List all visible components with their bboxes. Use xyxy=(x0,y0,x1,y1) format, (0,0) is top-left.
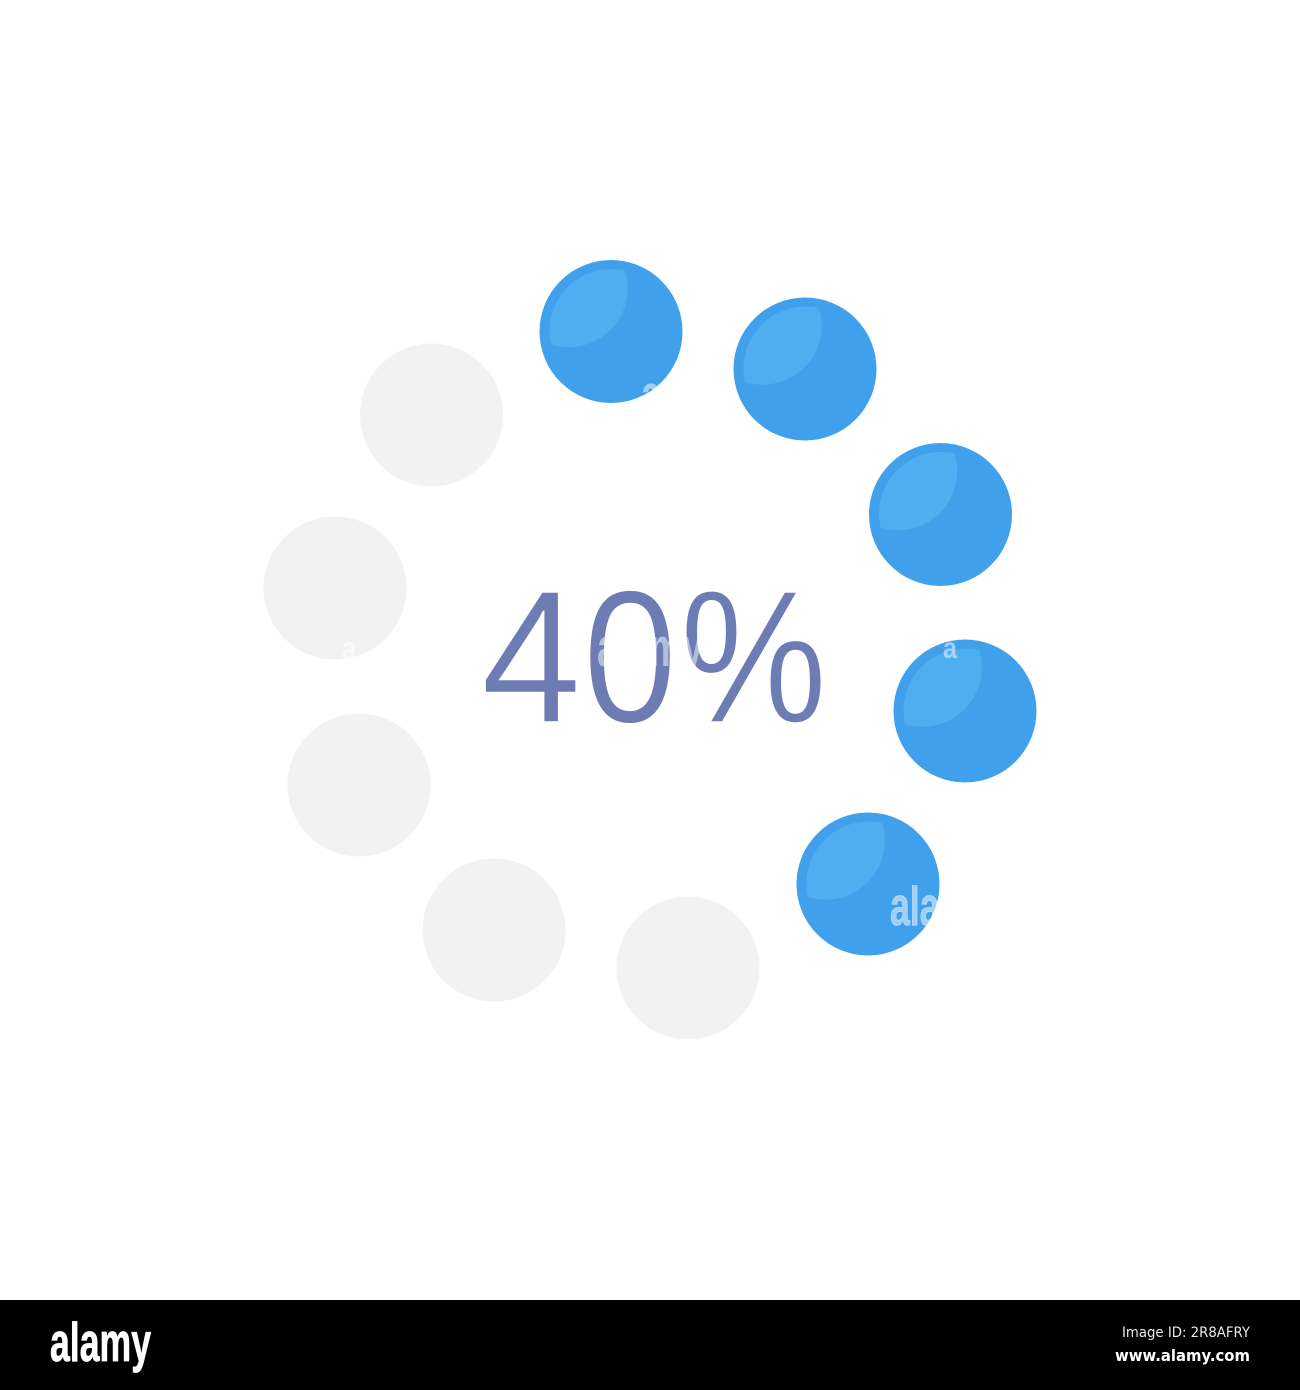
filled dot 2 xyxy=(734,298,876,440)
filled dot 1 xyxy=(540,260,682,403)
progress ring: 10 dots, 5 filled xyxy=(264,260,1036,1040)
watermark fragments xyxy=(342,363,991,937)
percentage label: 0 xyxy=(583,552,677,763)
watermark fragments: a xyxy=(943,632,957,665)
filled dot 4 xyxy=(894,640,1036,782)
empty dot 10 xyxy=(360,344,503,486)
filled dot 3 xyxy=(869,443,1012,586)
empty dot 7 xyxy=(422,858,566,1002)
watermark fragments: a xyxy=(342,630,357,668)
watermark fragments: a xyxy=(641,363,661,425)
empty dot 6 xyxy=(616,896,760,1040)
watermark fragments: alamy xyxy=(597,616,703,678)
empty dot 9 xyxy=(264,516,406,660)
footer logo: alamy xyxy=(50,1311,151,1373)
watermark fragments: alamy xyxy=(890,875,991,937)
percentage label: 4 xyxy=(481,552,581,763)
empty dot 8 xyxy=(288,714,430,856)
percentage label: % xyxy=(680,551,827,762)
website: www.alamy.com xyxy=(1115,1346,1250,1365)
image id: Image ID: 2R8AFRY xyxy=(1122,1325,1250,1341)
percentage label xyxy=(481,551,827,763)
filled dot 5 xyxy=(796,812,940,956)
footer bar xyxy=(0,1300,1300,1390)
